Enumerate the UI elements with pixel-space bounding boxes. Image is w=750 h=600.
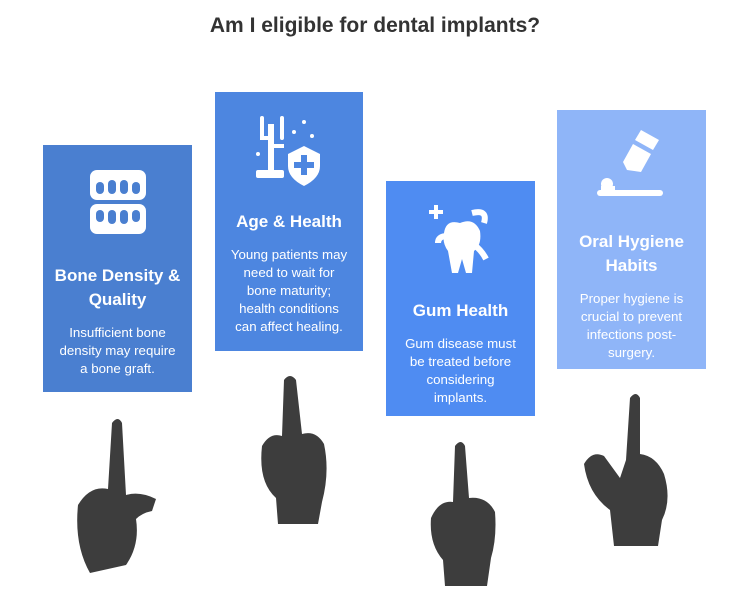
- title: Am I eligible for dental implants?: [210, 14, 540, 37]
- panel: age & health: Young patients may need to wait for bone maturity; health conditions can affect healing.: [231, 247, 347, 334]
- panel: oral hygiene: [557, 110, 706, 369]
- panel: age & health: [215, 92, 363, 351]
- icon: tree and shield: [256, 116, 320, 186]
- panel: oral hygiene: Proper hygiene is crucial to prevent infections post-surgery.: [580, 291, 683, 360]
- icon: teeth: [90, 170, 146, 234]
- icon: tooth: [429, 205, 489, 273]
- hand 1: [77, 419, 156, 573]
- panel: bone density: Insufficient bone density may require a bone graft.: [59, 325, 176, 376]
- panel: oral hygiene: Oral Hygiene Habits: [579, 232, 684, 275]
- panel: gum health: Gum Health: [413, 301, 508, 320]
- panel: bone density: [43, 145, 192, 392]
- hand 4: [584, 394, 668, 546]
- panel: gum health: [386, 181, 535, 416]
- hand 2: [261, 376, 327, 524]
- panel: bone density: Bone Density & Quality: [55, 266, 180, 309]
- icon: toothpaste: [597, 130, 663, 196]
- hand 3: [430, 442, 496, 586]
- panel: age & health: Age & Health: [236, 212, 342, 231]
- panel: gum health: Gum disease must be treated before considering implants.: [405, 336, 516, 405]
